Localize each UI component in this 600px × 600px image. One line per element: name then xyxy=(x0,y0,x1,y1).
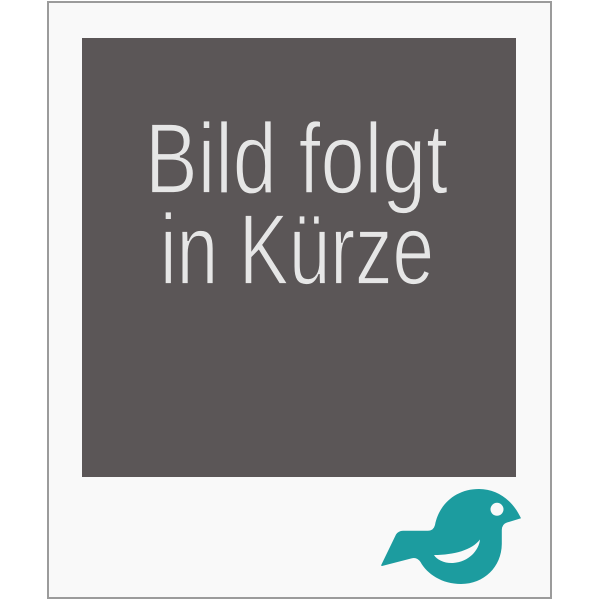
text line: Bild folgt: Bild folgt xyxy=(145,103,448,215)
text line: in Kürze: in Kürze xyxy=(160,194,434,306)
dark image placeholder panel xyxy=(82,38,516,477)
icon: teal bird logo xyxy=(381,489,521,584)
bird smile wing xyxy=(434,540,480,563)
bird eye xyxy=(490,503,504,516)
placeholder message xyxy=(145,103,448,306)
